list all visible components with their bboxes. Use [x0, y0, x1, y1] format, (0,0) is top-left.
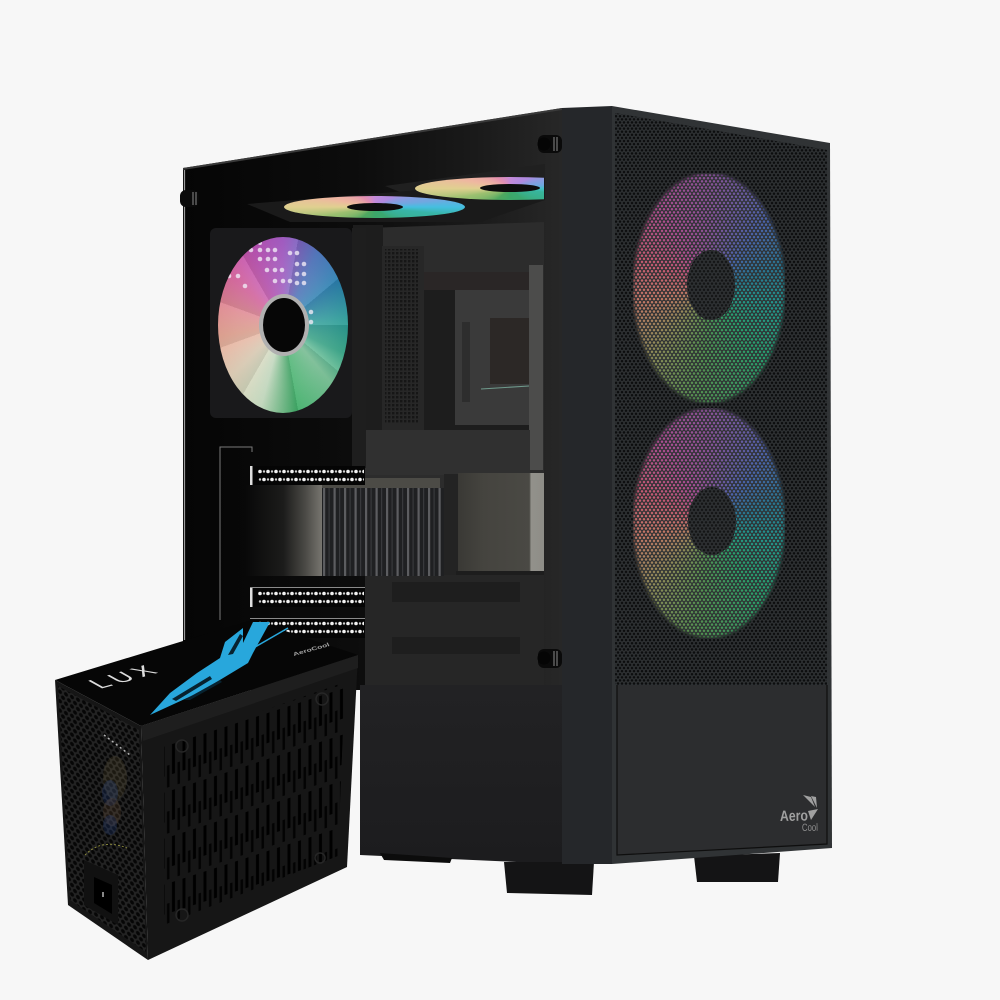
- fan see-through holes: [227, 241, 313, 324]
- icon: top exhaust mount plate: [247, 164, 545, 222]
- fan hub: [259, 294, 309, 356]
- standoff column strip: [529, 265, 543, 470]
- front slotted face: [141, 655, 358, 960]
- top face: [55, 620, 358, 726]
- motherboard compartment: [353, 222, 544, 685]
- icon: top RGB fan rear: [415, 177, 544, 200]
- product image: [55, 106, 832, 960]
- panel: front mesh grille: [615, 113, 827, 685]
- icon: top RGB fan front: [284, 196, 465, 218]
- icon: foot front: [694, 853, 780, 882]
- lower motherboard area: [365, 430, 544, 685]
- panel: front lower plate: [617, 685, 827, 855]
- icon: thumbscrew top right: [538, 135, 562, 153]
- AeroCool PSU mark: AeroCool: [292, 642, 331, 657]
- icon: foot centre: [504, 862, 594, 895]
- motherboard rear vent: [382, 246, 418, 430]
- panel: rear fan frame: [210, 228, 366, 468]
- panel: power supply shroud: [360, 685, 562, 864]
- panel: case corner pillar: [562, 106, 612, 864]
- icon: front RGB fan top: [633, 173, 785, 403]
- panel: power supply unit: [55, 620, 358, 960]
- icon: rear RGB fan: [218, 237, 348, 413]
- logo: AeroCool case badge: Aero: [780, 808, 808, 825]
- left perforated face: [55, 680, 148, 960]
- rear panel column: [353, 225, 383, 430]
- icon: thumbscrew top left: [180, 190, 199, 207]
- icon: AC power socket: [84, 860, 118, 925]
- icon: front RGB fan bottom: [633, 408, 785, 638]
- logo: AeroCool case badge: [780, 795, 818, 834]
- panel: tempered glass side window: [183, 108, 562, 690]
- front mesh backing: [615, 113, 827, 685]
- icon: PCI slot cover 3: [250, 618, 365, 638]
- icon: PCI slot cover 2: [250, 587, 365, 607]
- motherboard recess: [424, 290, 529, 430]
- icon: thumbscrew lower: [538, 649, 562, 668]
- Lux wordmark: LUX: [83, 662, 169, 692]
- logo: AeroCool case badge: Cool: [802, 822, 818, 834]
- blue Lux graphic: [150, 622, 288, 715]
- panel: front panel: [612, 106, 832, 864]
- icon: foot rear: [380, 853, 452, 863]
- icon: PCI slot cover 1: [250, 466, 365, 485]
- PSU screws: [176, 693, 328, 921]
- bracket outline: [220, 447, 252, 620]
- panel: graphics card: [245, 473, 544, 576]
